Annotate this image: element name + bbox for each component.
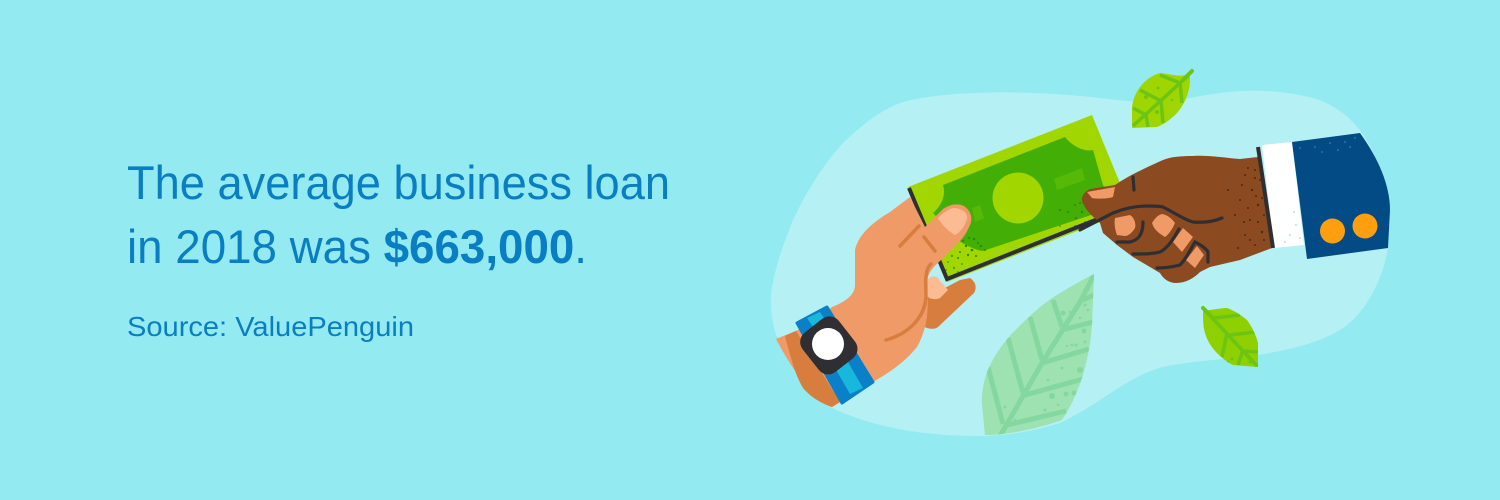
- watch case: [795, 312, 862, 379]
- banknote: [908, 115, 1131, 282]
- bottom leaf: [1200, 305, 1260, 369]
- heading line 1: The average business loan: [127, 156, 670, 209]
- button: [1352, 214, 1378, 238]
- watch strap: [797, 307, 873, 403]
- source note: Source: ValuePenguin: [127, 311, 414, 342]
- text block: statistic: [127, 156, 670, 342]
- top leaf: [1130, 70, 1192, 130]
- bottom leaf stem: [1203, 308, 1213, 318]
- button: [1320, 218, 1345, 244]
- illustration: hands exchanging money: [771, 70, 1390, 440]
- far fingers of left hand: [922, 278, 976, 329]
- left hand: [776, 197, 971, 407]
- shirt cuff: [1258, 142, 1304, 248]
- banknote centre medallion: [992, 172, 1044, 224]
- banknote dark edge: [909, 188, 1113, 279]
- thumbnail: [1087, 187, 1115, 199]
- fingernails: [1115, 214, 1204, 268]
- infographic canvas: [128, 68, 1390, 436]
- thumbnail: [938, 208, 967, 235]
- large pale leaf: [982, 274, 1094, 435]
- finger lines: [1080, 177, 1222, 268]
- skin speckle: [1227, 167, 1265, 249]
- right hand: [1080, 156, 1272, 283]
- finger tip: [927, 276, 948, 299]
- background blob: [771, 91, 1389, 436]
- watch: [795, 307, 873, 403]
- hand crease lines: [886, 226, 935, 340]
- forearm shadow: [785, 331, 840, 407]
- watch face: [812, 328, 844, 360]
- heading line 2 with bold amount: in 2018 was $663,000.: [127, 220, 587, 273]
- top leaf stem: [1183, 71, 1192, 80]
- jacket sleeve: [1292, 133, 1390, 259]
